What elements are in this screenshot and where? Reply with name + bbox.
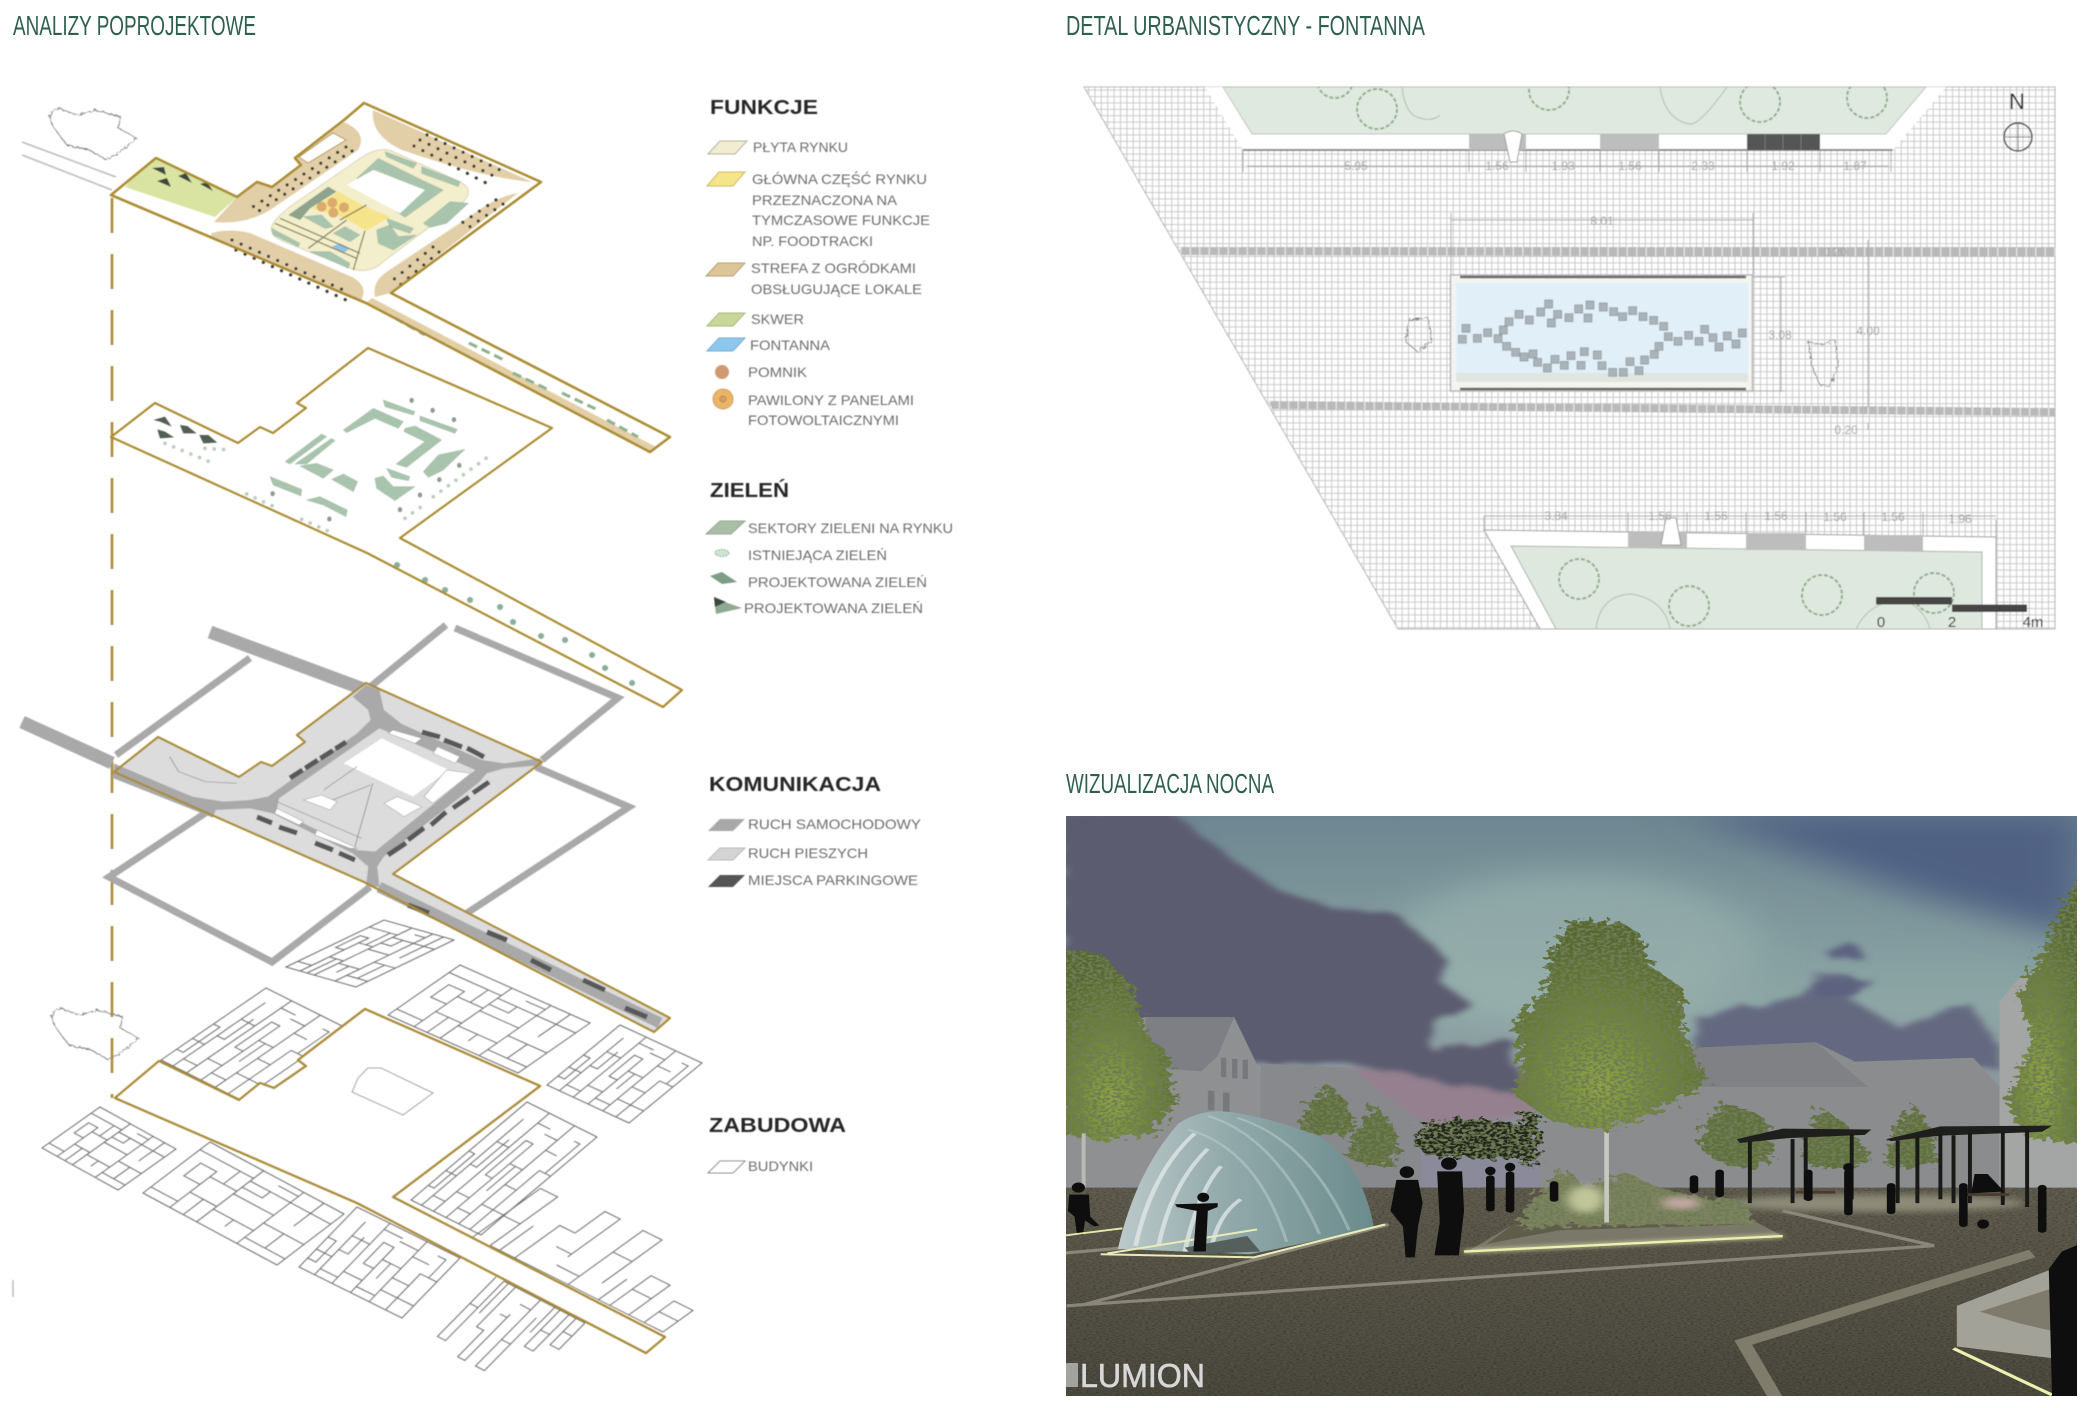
right buildings: [1540, 1042, 2000, 1195]
dimensions: 5.95: [1344, 159, 1368, 173]
swatch: fontanna: [707, 338, 745, 351]
legend: zabudowa: [708, 1115, 846, 1174]
white sectors: [275, 730, 471, 848]
ball: [1977, 1219, 1989, 1229]
lit ground at pavilions: [1724, 1195, 2026, 1212]
skwer pavilions: [152, 167, 213, 191]
tan garden zones: [210, 110, 532, 302]
legend: funkcje: SKWER: [751, 311, 804, 327]
trees: [1357, 89, 1397, 129]
dimensions: 1.56: [1881, 510, 1905, 524]
legend: komunikacja: RUCH SAMOCHODOWY: [748, 816, 922, 832]
fountain basin: [1450, 275, 1752, 391]
legend: funkcje: [706, 97, 930, 428]
dimensions: 1.93: [1551, 159, 1575, 173]
mid-distance people: [1490, 1172, 2042, 1230]
shrubs: [288, 187, 337, 220]
corridor strip: [366, 298, 656, 452]
dimensions: 1.56: [1618, 159, 1642, 173]
title: analizy poprojektowe: ANALIZY POPROJEKTOWE: [13, 10, 256, 41]
yellow main area: [312, 192, 390, 231]
panel: fountain plan: [1084, 62, 2055, 631]
person at bench: [1504, 131, 1522, 162]
scale bar: 0: [1877, 614, 1885, 631]
pedestrian area: [114, 683, 670, 1032]
legend: funkcje: STREFA Z OGRÓDKAMI: [751, 260, 916, 276]
layer: komunikacja: [22, 625, 670, 1032]
person: [1661, 518, 1681, 545]
legend: zieleń: PROJEKTOWANA ZIELEŃ: [748, 574, 927, 590]
legend: funkcje: PAWILONY Z PANELAMI: [748, 392, 914, 408]
central tree: [1603, 1129, 1610, 1222]
dimensions: 8.01: [1590, 214, 1614, 228]
market plate: [271, 149, 468, 271]
fountain jets: [1458, 300, 1746, 376]
legend: funkcje: TYMCZASOWE FUNKCJE: [752, 212, 930, 228]
child in fountain: [1197, 1193, 1209, 1202]
fountain tunnel: [1101, 1111, 1385, 1257]
swatch: główna część: [707, 172, 745, 186]
central building: [352, 1068, 433, 1115]
icon: projektowana 2: [714, 597, 742, 614]
dimensions: 1.56: [1485, 159, 1509, 173]
building blocks: [42, 920, 738, 1389]
lower green block: [1484, 518, 1996, 629]
legend: funkcje: FOTOWOLTAICZNYMI: [748, 412, 899, 428]
layer: zieleń: [111, 348, 682, 707]
surrounding roads: [22, 632, 366, 763]
inner road ring and flares: [114, 685, 542, 887]
swatch: ruch pieszych: [708, 848, 745, 860]
sky dark right: [1684, 812, 2085, 940]
road lines west: [22, 142, 116, 190]
corridor leaves: [397, 565, 632, 683]
garden tree dots: [232, 135, 503, 300]
icon: istniejąca: [715, 550, 729, 556]
panel: night visualisation: [1060, 812, 2085, 1399]
benches: [1628, 532, 1923, 551]
outline gold: [114, 683, 670, 1032]
legend: zieleń: ISTNIEJĄCA ZIELEŃ: [748, 547, 887, 563]
heading: KOMUNIKACJA: [709, 774, 881, 796]
inner plate: [277, 728, 475, 852]
legend: funkcje: OBSŁUGUJĄCE LOKALE: [751, 281, 922, 297]
dimensions: 1.87: [1843, 159, 1867, 173]
tree right: [2006, 874, 2085, 1145]
skwer area: [125, 158, 237, 217]
green sectors: [272, 152, 468, 268]
paving lines: [1060, 1211, 1934, 1306]
block bottom right: [1954, 1242, 2085, 1399]
left person: [1072, 1183, 1085, 1193]
dimensions: [1243, 150, 1996, 537]
swatch: sektory: [706, 521, 745, 534]
small mark: [12, 1280, 14, 1297]
bushes: [1402, 87, 1727, 124]
bushes: [1596, 594, 1930, 629]
background trees: [1300, 1085, 1937, 1168]
dimensions: 1.92: [1771, 159, 1795, 173]
white building gap: [299, 133, 346, 163]
strip light far left: [1060, 1228, 1122, 1236]
legend: zieleń: PROJEKTOWANA ZIELEŃ: [744, 600, 923, 616]
dimensions: 2.33: [1691, 159, 1715, 173]
small trees: [165, 443, 488, 534]
outline gold: [115, 1009, 665, 1353]
swatch: miejsca parkingowe: [708, 875, 745, 887]
swatch: skwer: [707, 313, 745, 326]
left buildings: [1066, 1017, 1260, 1152]
dimensions: 3.84: [1544, 509, 1568, 523]
legend: funkcje: GŁÓWNA CZĘŚĆ RYNKU: [752, 170, 927, 187]
swatch: budynki: [708, 1161, 745, 1173]
monuments: [317, 198, 349, 218]
paths inside: [170, 757, 373, 847]
layer: funkcje: [22, 103, 670, 452]
dimensions: 1.56: [1823, 510, 1847, 524]
pavilions: [1737, 1126, 2052, 1207]
logo: LUMION: [1080, 1357, 1205, 1394]
legend: zieleń: [706, 479, 953, 616]
planter with grasses: [1464, 1168, 1783, 1252]
legend: komunikacja: RUCH PIESZYCH: [748, 845, 868, 861]
dimensions: 1.56: [1704, 509, 1728, 523]
legend: komunikacja: [708, 774, 922, 888]
left building windows: [1208, 1058, 1248, 1112]
legend: funkcje: FONTANNA: [750, 337, 831, 353]
dimensions: 3.08: [1768, 328, 1792, 342]
paving bands: [1180, 247, 2055, 257]
ground: [1060, 1188, 2085, 1399]
cobblestone texture: [1060, 1188, 2085, 1399]
title: wizualizacja nocna: WIZUALIZACJA NOCNA: [1066, 768, 1274, 799]
scale bar: [1876, 597, 2043, 631]
green sectors: [153, 400, 488, 534]
sky: [1066, 816, 2077, 1188]
foreground figure: [2049, 1242, 2085, 1399]
seated on bench: [1971, 1174, 2004, 1193]
title: detal urbanistyczny: DETAL URBANISTYCZNY - FONTANNA: [1066, 10, 1425, 41]
cloud right: [1691, 974, 2000, 1067]
people silhouettes: [1068, 1157, 2047, 1257]
background dark trees: [1416, 1114, 1540, 1164]
figures around fountain: [1406, 318, 1432, 352]
legend: funkcje: PŁYTA RYNKU: [753, 139, 848, 155]
heading: FUNKCJE: [710, 97, 818, 119]
top green block: [1205, 86, 1946, 163]
icon: pomnik: [715, 365, 729, 379]
dimensions: 1.56: [1648, 509, 1672, 523]
scale bar: 2: [1948, 614, 1956, 631]
icon: projektowana 1: [710, 572, 737, 584]
outline gold: [111, 348, 682, 707]
trees: [1559, 559, 1599, 599]
couple: [1400, 1166, 1414, 1178]
icon: tree outline top: [49, 108, 136, 160]
dashed vertical connector: [111, 198, 113, 1098]
white centre: [347, 170, 425, 213]
cloud left: [1060, 812, 1520, 1095]
swatch: strefa: [706, 263, 745, 276]
pavilions: [153, 417, 217, 443]
parking bays: [257, 732, 647, 1017]
wisps: [1816, 945, 1868, 998]
scale bar: 4m: [2023, 614, 2043, 631]
tree left: [1060, 947, 1175, 1141]
central building redraw: [352, 1068, 433, 1115]
icon: tree outline lower: [51, 1008, 138, 1060]
legend: zieleń: SEKTORY ZIELENI NA RYNKU: [748, 520, 953, 536]
layer: zabudowa: [42, 920, 738, 1389]
paving grid: [1084, 87, 2055, 629]
benches: [1469, 134, 1526, 150]
corridor greenery: [395, 318, 638, 437]
heading: ZIELEŃ: [710, 479, 789, 502]
legend: funkcje: NP. FOODTRACKI: [752, 233, 873, 249]
outline gold: [111, 103, 670, 452]
fountain base light: [1101, 1224, 1385, 1257]
legend: komunikacja: MIEJSCA PARKINGOWE: [748, 872, 918, 888]
dimensions: 1.96: [1948, 512, 1972, 526]
legend: zabudowa: BUDYNKI: [748, 1158, 813, 1174]
legend: funkcje: POMNIK: [748, 364, 808, 380]
exploded axonometric diagram: [13, 103, 738, 1389]
heading: ZABUDOWA: [709, 1115, 846, 1137]
corridor road: [379, 887, 660, 1023]
north arrow: N: [2009, 89, 2025, 114]
icon: pawilony: [713, 389, 733, 409]
dimensions: 4.00: [1856, 324, 1880, 338]
dimensions: 1.56: [1764, 509, 1788, 523]
swatch: płyta rynku: [708, 141, 747, 154]
paths: [275, 205, 367, 270]
north arrow: [2004, 89, 2032, 151]
white centre: [344, 738, 449, 797]
sky light centre: [1406, 864, 1752, 1004]
pink horizon: [1350, 1068, 1537, 1126]
legend: [706, 97, 953, 1174]
dimensions: 0.20: [1834, 423, 1858, 437]
dimensions: 0.20: [1823, 245, 1847, 259]
fountain blue: [332, 243, 350, 253]
legend: funkcje: PRZEZNACZONA NA: [752, 192, 898, 208]
swatch: ruch samochodowy: [708, 819, 745, 831]
